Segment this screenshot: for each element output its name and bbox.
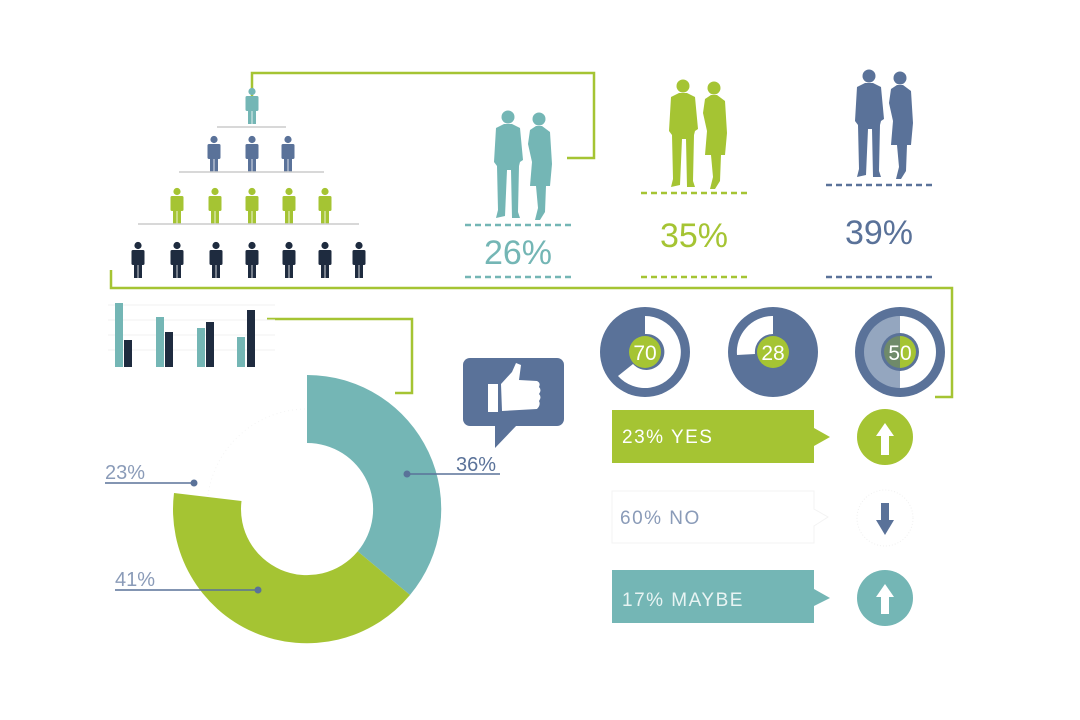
donut chart [105, 375, 500, 643]
gauge 28 [728, 307, 818, 397]
gauge 50 [855, 307, 945, 397]
banner: 23% YES: 23% YES [622, 427, 713, 448]
label 36%: 36% [456, 454, 496, 476]
label 41% [115, 569, 262, 594]
icon: up arrow green [857, 409, 913, 465]
pyramid of people [132, 88, 366, 278]
people group 26% [465, 110, 572, 277]
people group 35%: 35% [660, 217, 728, 255]
gauge 28: 28 [761, 342, 785, 365]
label 36% [404, 454, 500, 478]
label 23% [105, 462, 198, 486]
banner: 17% MAYBE: 17% MAYBE [622, 590, 744, 611]
people group 39% [826, 70, 933, 277]
icon: thumbs up bubble [463, 358, 564, 448]
people group 39%: 39% [845, 214, 913, 252]
people group 26%: 26% [484, 234, 552, 272]
label 41%: 41% [115, 569, 155, 591]
icon: down arrow [857, 490, 913, 546]
banner: 60% NO [612, 491, 828, 543]
banner: 23% YES [612, 410, 830, 463]
bar chart [108, 303, 275, 367]
gauge 50: 50 [888, 342, 912, 365]
banner: 17% MAYBE [612, 570, 830, 623]
people group 35% [641, 80, 748, 277]
banner: 60% NO: 60% NO [620, 508, 701, 529]
gauge 70 [600, 307, 690, 397]
label 23%: 23% [105, 462, 145, 484]
connector lines [111, 73, 952, 397]
icon: up arrow teal [857, 570, 913, 626]
gauge 70: 70 [633, 342, 657, 365]
